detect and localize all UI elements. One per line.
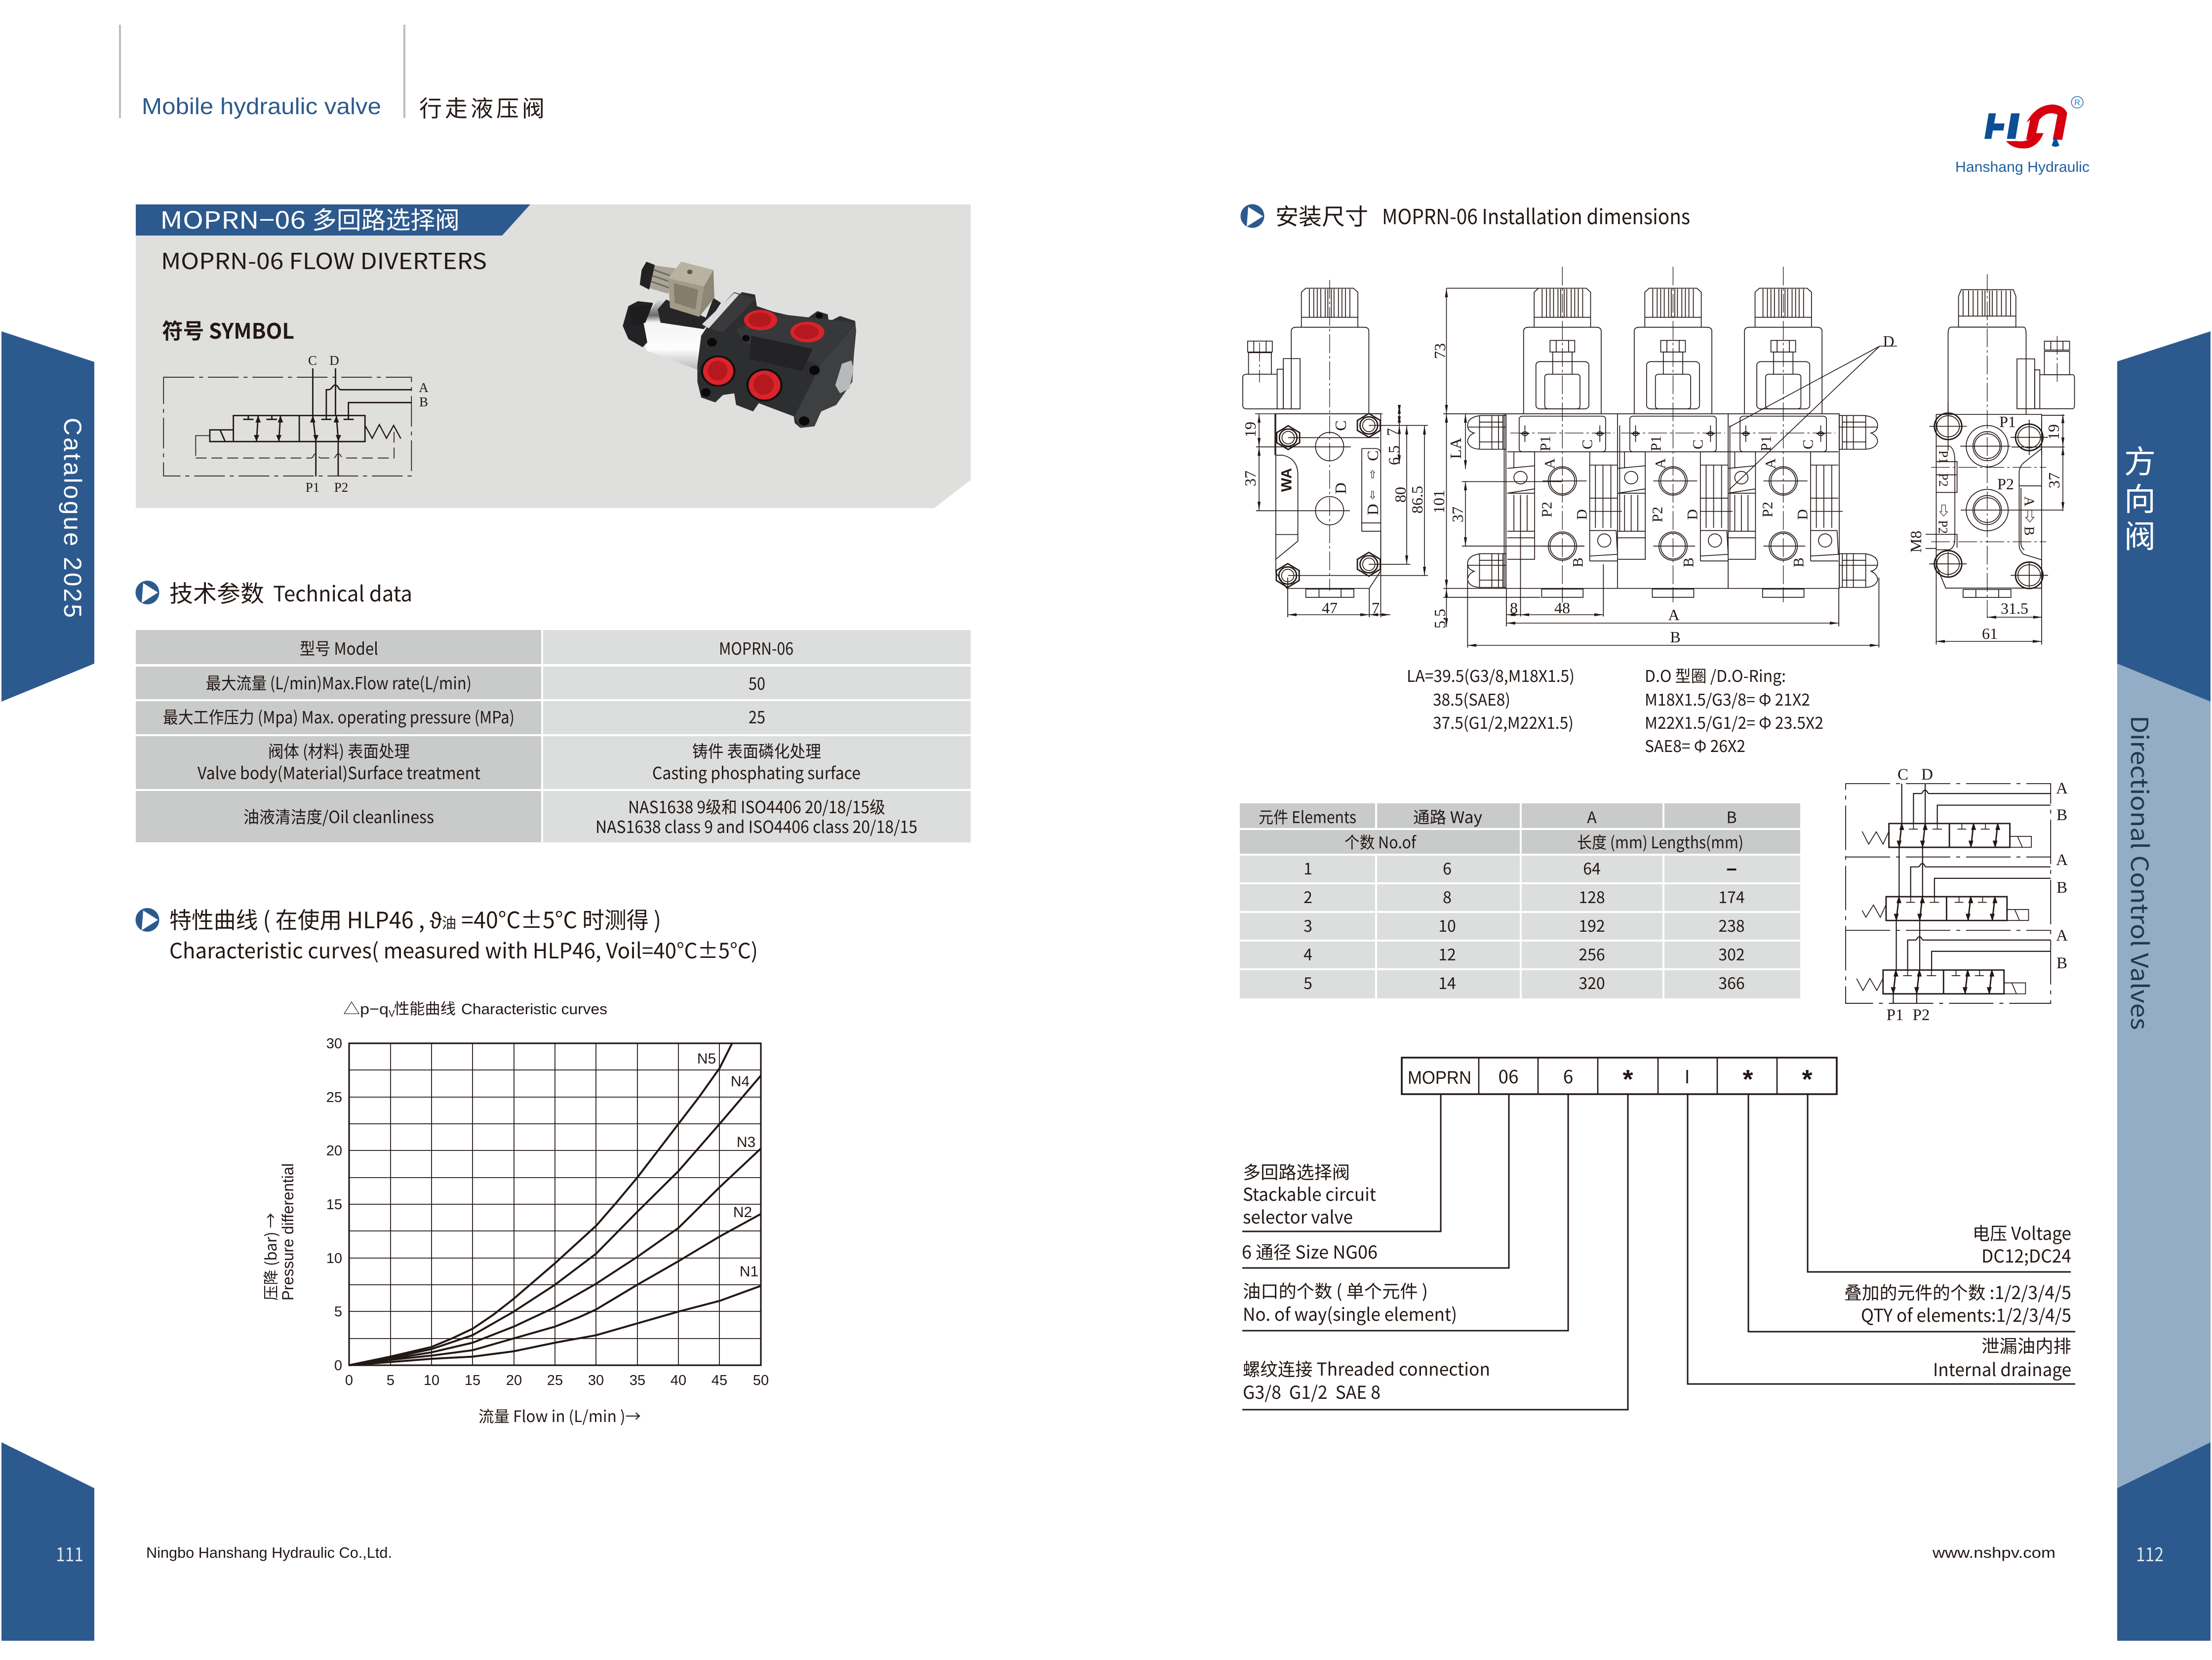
front view labels: B — [1570, 557, 1586, 567]
front view labels: C — [1690, 439, 1706, 449]
x axis tick labels: 10 — [424, 1373, 439, 1388]
side view dimensions — [1255, 405, 1424, 615]
front view labels: D — [1883, 332, 1895, 350]
curves N1-N5 — [349, 1043, 761, 1365]
heading: characteristic curves: 特性曲线 ( 在使用 HLP46 , ϑ油 =40°C±5°C 时测得 ) — [169, 903, 661, 935]
table: lengths by element count: 256 — [1579, 943, 1605, 965]
table: technical data: 阀体 (材料) 表面处理 — [268, 738, 410, 762]
y axis tick labels: 0 — [334, 1358, 342, 1374]
right view labels: 37 — [2045, 473, 2063, 488]
table: technical data: 50 — [749, 671, 765, 695]
order code left descriptions: selector valve — [1243, 1203, 1353, 1229]
table: technical data — [136, 630, 971, 842]
front view labels: B — [1790, 557, 1807, 567]
table: technical data: NAS1638 class 9 and ISO4406 class 20/18/15 — [595, 814, 917, 838]
order code right descriptions: 泄漏油内排 — [1981, 1332, 2071, 1358]
right view labels: P2 — [1936, 473, 1950, 487]
footer company name: Ningbo Hanshang Hydraulic Co.,Ltd. — [146, 1544, 392, 1561]
front view labels: P1 — [1538, 435, 1553, 451]
left sidebar: page number tab — [1, 1442, 94, 1641]
chart title — [343, 996, 607, 1019]
hydraulic symbol — [163, 353, 429, 495]
schematic: three stacked valve elements: C — [1897, 766, 1908, 784]
order code right descriptions — [1844, 1220, 2071, 1382]
table: lengths by element count: 元件 Elements — [1259, 804, 1356, 828]
order code left descriptions: 油口的个数 ( 单个元件 ) — [1243, 1277, 1428, 1303]
x axis tick labels: 35 — [630, 1373, 645, 1388]
x axis tick labels: 40 — [671, 1373, 686, 1388]
side view labels: 86.5 — [1408, 486, 1426, 514]
table: lengths by element count: 个数 No.of — [1344, 830, 1417, 853]
logo: Hanshang Hydraulic: Hanshang Hydraulic — [1955, 159, 2090, 175]
y axis tick labels: 10 — [326, 1251, 342, 1266]
x axis tick labels: 25 — [547, 1373, 563, 1388]
header chinese title: 行走液压阀 — [419, 91, 545, 123]
heading: technical data: 技术参数 — [169, 575, 264, 609]
order code right descriptions: DC12;DC24 — [1981, 1242, 2071, 1268]
order code boxes: * — [1742, 1065, 1753, 1094]
order code left descriptions: 多回路选择阀 — [1243, 1158, 1350, 1184]
front view labels: 5.5 — [1431, 609, 1449, 629]
side view labels: 80 — [1391, 487, 1409, 503]
vertical chinese category — [2124, 437, 2156, 557]
x axis tick labels: 0 — [345, 1373, 353, 1388]
side view labels: ⇩ — [1368, 490, 1377, 502]
front view labels: D — [1685, 509, 1700, 520]
order code boxes: I — [1685, 1062, 1690, 1089]
schematic: three stacked valve elements: A — [2056, 851, 2068, 869]
right sidebar — [2117, 331, 2211, 1641]
table: lengths by element count: 14 — [1438, 971, 1456, 994]
table: lengths by element count: 192 — [1579, 914, 1605, 937]
symbol heading: 符号 SYMBOL — [162, 315, 294, 345]
chart title: △p−q — [343, 1000, 389, 1018]
subtitle: MOPRN-06 FLOW DIVERTERS — [161, 243, 487, 276]
table: technical data: 25 — [749, 704, 765, 728]
table: technical data: 最大工作压力 (Mpa) Max. operating pressure (MPa) — [163, 704, 514, 728]
right view labels: P1 — [1999, 413, 2016, 431]
dimension notes: O-ring values — [1645, 663, 1823, 757]
x axis tick labels: 5 — [387, 1373, 395, 1388]
order code right descriptions: 叠加的元件的个数 :1/2/3/4/5 — [1844, 1279, 2071, 1304]
vertical chinese category: 阀 — [2124, 512, 2156, 557]
side view labels: C — [1364, 450, 1382, 461]
hydraulic symbol: C — [308, 353, 317, 368]
right view labels: A ⇨ B — [2021, 496, 2036, 536]
heading: technical data: Technical data — [273, 577, 412, 608]
y axis title — [259, 1163, 297, 1301]
heading: installation dimensions — [1240, 199, 1690, 232]
schematic: three stacked valve elements: A — [2056, 780, 2068, 797]
order code boxes: MOPRN — [1408, 1067, 1471, 1088]
hydraulic symbol: A — [419, 380, 429, 395]
title ribbon — [136, 204, 530, 236]
right view labels: P1 — [1936, 450, 1950, 464]
y axis tick labels: 25 — [326, 1090, 342, 1106]
table: lengths by element count: 12 — [1438, 943, 1456, 965]
table: lengths by element count: B — [1726, 805, 1737, 828]
side view labels: 7 — [1372, 599, 1380, 617]
front view labels — [1430, 332, 1895, 646]
dimension notes: O-ring values: SAE8= Φ 26X2 — [1645, 733, 1745, 757]
right view labels: 61 — [1982, 625, 1998, 642]
table: lengths by element count: 174 — [1718, 885, 1745, 908]
sidebar catalogue label: Catalogue 2025 — [59, 418, 86, 618]
front view labels: P2 — [1649, 507, 1666, 522]
heading: characteristic curves: Characteristic curves( measured with HLP46, Voil=40°C±5°C) — [169, 934, 758, 965]
order code boxes: 6 — [1563, 1062, 1573, 1089]
hydraulic symbol: B — [419, 395, 428, 409]
heading: technical data — [135, 575, 412, 609]
table: lengths by element count: 1 — [1304, 857, 1312, 879]
side view labels: 19 — [1241, 422, 1259, 437]
side view labels: D — [1364, 504, 1382, 515]
side view labels: 47 — [1322, 599, 1338, 617]
right view labels: 31.5 — [2001, 599, 2028, 617]
y axis title: Pressure differential — [279, 1163, 297, 1301]
order code left descriptions: G3/8 G1/2 SAE 8 — [1243, 1379, 1381, 1404]
schematic: three stacked valve elements: P2 — [1913, 1006, 1930, 1024]
table: technical data: MOPRN-06 — [719, 635, 793, 660]
side view labels: WA — [1279, 468, 1295, 492]
dimension notes: LA values: 38.5(SAE8) — [1433, 687, 1510, 711]
right view labels — [1907, 413, 2063, 642]
header divider rules — [119, 25, 405, 118]
ribbon title: 多回路选择阀 — [312, 201, 460, 236]
order code left descriptions: 6 通径 Size NG06 — [1242, 1238, 1378, 1264]
x axis tick labels: 15 — [465, 1373, 480, 1388]
side view labels: C — [1332, 420, 1349, 431]
y axis tick labels: 30 — [326, 1036, 342, 1052]
order code boxes: * — [1802, 1065, 1813, 1094]
front view labels: P1 — [1648, 435, 1664, 451]
right view labels: ⇨ P2 — [1936, 504, 1950, 534]
right view labels: M8 — [1907, 531, 1925, 553]
side view labels — [1241, 420, 1426, 617]
vertical chinese category: 向 — [2124, 474, 2156, 520]
table: lengths by element count: 8 — [1443, 885, 1452, 908]
dimension drawing: side view left — [1241, 280, 1428, 617]
vertical chinese category: 方 — [2124, 437, 2156, 482]
dimension notes: LA values — [1407, 663, 1575, 734]
table: lengths by element count: 64 — [1583, 857, 1601, 879]
table: lengths by element count: 128 — [1579, 885, 1605, 908]
schematic: three stacked valve elements: P1 — [1887, 1006, 1903, 1024]
chart title: Characteristic curves — [461, 1000, 607, 1018]
schematic: three stacked valve elements — [1846, 766, 2068, 1024]
front view labels: 8 — [1510, 599, 1518, 617]
table: lengths by element count: 3 — [1304, 914, 1312, 937]
schematic: three stacked valve elements: B — [2056, 806, 2067, 824]
front view labels: A — [1668, 606, 1680, 624]
order code right descriptions: QTY of elements:1/2/3/4/5 — [1861, 1302, 2071, 1327]
hydraulic symbol: D — [329, 353, 339, 368]
x axis tick labels — [345, 1373, 769, 1388]
panel: product header — [136, 201, 971, 508]
dimension drawing: front view three elements — [1430, 267, 1897, 648]
front view labels: P1 — [1758, 435, 1775, 451]
y axis tick labels: 5 — [334, 1304, 342, 1320]
curve labels: N4 — [731, 1073, 750, 1090]
front view labels: LA — [1447, 438, 1464, 459]
table: lengths by element count: 302 — [1718, 943, 1745, 965]
ribbon title: MOPRN−06 — [160, 201, 306, 236]
front view labels: A — [1763, 458, 1778, 469]
chart title: V — [389, 1009, 395, 1019]
table: lengths by element count: A — [1587, 805, 1597, 828]
table: technical data: 铸件 表面磷化处理 — [692, 738, 821, 762]
front view labels: C — [1800, 439, 1816, 449]
dimension notes: O-ring values: M18X1.5/G3/8= Φ 21X2 — [1645, 687, 1810, 711]
front view labels: A — [1541, 458, 1558, 469]
front view labels: 73 — [1431, 343, 1449, 359]
order code left descriptions: 螺纹连接 Threaded connection — [1243, 1355, 1490, 1381]
schematic: three stacked valve elements: B — [2056, 879, 2067, 897]
side view labels: 7 — [1383, 428, 1401, 436]
side view labels: 6.5 — [1385, 445, 1403, 465]
table: lengths by element count: 长度 (mm) Lengths(mm) — [1577, 830, 1743, 853]
chart title: 性能曲线 — [394, 996, 456, 1019]
table: technical data: Valve body(Material)Surface treatment — [198, 760, 480, 784]
right view labels: 19 — [2045, 424, 2062, 440]
order code right descriptions: 电压 Voltage — [1973, 1220, 2071, 1245]
order code boxes: * — [1622, 1065, 1633, 1094]
table: lengths by element count: 通路 Way — [1413, 804, 1482, 828]
front view labels: 37 — [1449, 507, 1466, 522]
side view labels: ⇧ — [1368, 469, 1377, 481]
front view labels: C — [1579, 439, 1596, 449]
order code left descriptions — [1242, 1158, 1490, 1404]
x axis tick labels: 30 — [588, 1373, 604, 1388]
front view labels: B — [1670, 628, 1681, 646]
front view labels: D — [1574, 509, 1590, 520]
x axis tick labels: 20 — [506, 1373, 522, 1388]
x axis tick labels: 50 — [753, 1373, 769, 1388]
front view labels: D — [1794, 509, 1811, 520]
front view labels: 101 — [1430, 490, 1448, 514]
table: lengths by element count: – — [1726, 852, 1737, 882]
product photo: valve — [623, 262, 856, 428]
front view dimensions — [1447, 288, 1897, 645]
schematic: three stacked valve elements: D — [1921, 766, 1933, 784]
y axis tick labels: 20 — [326, 1143, 342, 1159]
page number 112: 112 — [2136, 1540, 2164, 1567]
right view labels: P2 — [1997, 475, 2014, 493]
right view dimensions — [1936, 414, 2063, 641]
table: lengths by element count: 366 — [1718, 971, 1745, 994]
y axis tick labels: 15 — [326, 1197, 342, 1213]
table: lengths by element count: 2 — [1304, 885, 1312, 908]
logo: Hanshang Hydraulic — [1955, 97, 2090, 175]
order code boxes — [1402, 1058, 1837, 1094]
curve labels: N3 — [737, 1134, 755, 1150]
dimension notes: LA values: LA=39.5(G3/8,M18X1.5) — [1407, 663, 1575, 687]
table: technical data: Casting phosphating surface — [652, 760, 861, 784]
order code leader lines — [1242, 1094, 2075, 1410]
schematic: three stacked valve elements: B — [2056, 954, 2067, 972]
order code left descriptions: No. of way(single element) — [1243, 1301, 1457, 1326]
plot grid — [349, 1043, 761, 1365]
side view labels: 37 — [1241, 471, 1259, 486]
table: lengths by element count: 10 — [1438, 914, 1456, 937]
table: lengths by element count: 320 — [1579, 971, 1605, 994]
dimension drawing: side view right — [1907, 274, 2075, 644]
heading: installation dimensions: MOPRN-06 Installation dimensions — [1382, 200, 1690, 231]
vertical english category: Directional Control Valves — [2124, 715, 2159, 1030]
left sidebar: top tab — [1, 331, 94, 702]
y axis tick labels — [326, 1036, 342, 1374]
order code boxes: 06 — [1498, 1062, 1519, 1089]
hydraulic symbol: P2 — [334, 480, 348, 495]
front view labels: B — [1681, 557, 1697, 567]
left sidebar: page number tab: 111 — [56, 1540, 83, 1567]
front view labels: P2 — [1760, 502, 1776, 517]
hydraulic symbol: P1 — [306, 480, 319, 495]
logo: Hanshang Hydraulic: R — [2074, 99, 2080, 107]
ribbon title — [160, 201, 460, 236]
front view labels: A — [1652, 458, 1669, 469]
front view labels: 48 — [1554, 599, 1570, 617]
x axis title: 流量 Flow in (L/min )→ — [478, 1404, 641, 1427]
table: lengths by element count: 238 — [1718, 914, 1745, 937]
x axis tick labels: 45 — [711, 1373, 727, 1388]
header english title: Mobile hydraulic valve — [142, 93, 381, 119]
dimension notes: O-ring values: M22X1.5/G1/2= Φ 23.5X2 — [1645, 710, 1823, 734]
table: lengths by element count: 5 — [1304, 971, 1312, 994]
dimension notes: O-ring values: D.O 型圈 /D.O-Ring: — [1645, 663, 1786, 687]
side view labels: D — [1332, 482, 1349, 494]
front view labels: P2 — [1539, 502, 1555, 517]
heading: characteristic curves — [135, 903, 758, 965]
panel background — [136, 204, 971, 508]
curve labels: N5 — [697, 1051, 716, 1067]
heading: installation dimensions: 安装尺寸 — [1275, 199, 1368, 232]
schematic: three stacked valve elements: A — [2056, 927, 2068, 945]
curve labels: N1 — [740, 1264, 758, 1280]
table: technical data: NAS1638 9级和 ISO4406 20/18/15级 — [628, 794, 885, 818]
order code right descriptions: Internal drainage — [1933, 1356, 2071, 1382]
table: technical data: 型号 Model — [300, 635, 378, 660]
curve labels: N2 — [733, 1204, 752, 1221]
table: technical data: 最大流量 (L/min)Max.Flow rate(L/min) — [206, 670, 472, 694]
table: lengths by element count — [1240, 803, 1800, 998]
table: technical data: 油液清洁度/Oil cleanliness — [243, 804, 434, 828]
order code left descriptions: Stackable circuit — [1243, 1181, 1376, 1206]
footer website: www.nshpv.com — [1932, 1544, 2055, 1561]
curve labels — [697, 1051, 758, 1280]
dimension notes: LA values: 37.5(G1/2,M22X1.5) — [1433, 710, 1574, 734]
table: lengths by element count: 4 — [1304, 943, 1312, 965]
chart: delta p - qv characteristic curves — [259, 996, 769, 1427]
table: lengths by element count: 6 — [1443, 857, 1452, 879]
y axis title: 压降 (bar) → — [259, 1213, 281, 1301]
